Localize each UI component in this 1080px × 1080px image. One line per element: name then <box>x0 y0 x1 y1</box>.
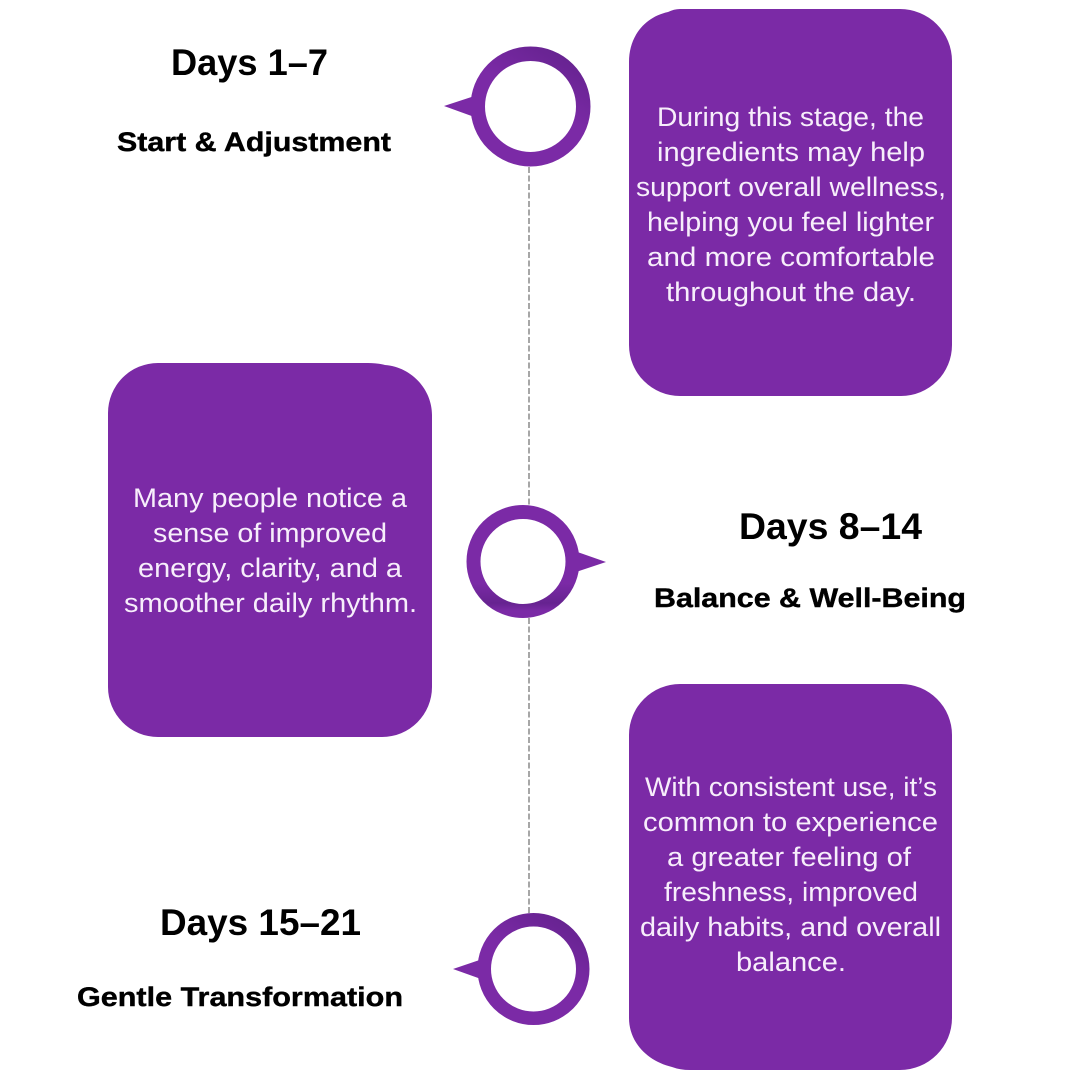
marker: days 1-7 ring <box>444 54 583 159</box>
panel: days 1-7 description: and more comfortable <box>647 242 935 272</box>
panel: days 8-14 description: energy, clarity, and a <box>138 553 402 583</box>
timeline connector <box>528 167 530 913</box>
marker: days 15-21 ring <box>453 920 583 1018</box>
panel: days 15-21 description <box>629 684 952 1070</box>
panel: days 15-21 description: a greater feeling of <box>667 842 912 872</box>
panel: days 8-14 description: Many people notice a <box>133 483 407 513</box>
panel: days 15-21 description: daily habits, and overall <box>640 912 941 942</box>
panel: days 1-7 description: ingredients may help <box>657 137 925 167</box>
marker: days 8-14 ring <box>474 512 606 611</box>
heading: days 8-14: Days 8–14 <box>739 506 922 547</box>
panel: days 15-21 description: freshness, improved <box>664 877 918 907</box>
subheading: gentle transformation: Gentle Transformation <box>77 982 403 1012</box>
panel: days 15-21 description: With consistent use, it’s <box>645 772 937 802</box>
subheading: balance and well-being: Balance & Well-Being <box>654 583 966 613</box>
panel: days 1-7 description <box>629 9 952 396</box>
panel: days 1-7 description: support overall wellness, <box>636 172 946 202</box>
panel: days 8-14 description: sense of improved <box>153 518 387 548</box>
panel: days 15-21 description: balance. <box>736 947 846 977</box>
subheading: start and adjustment: Start & Adjustment <box>117 127 391 157</box>
panel: days 1-7 description: During this stage, the <box>657 102 924 132</box>
heading: days 15-21: Days 15–21 <box>160 902 361 943</box>
panel: days 8-14 description <box>108 363 432 737</box>
panel: days 15-21 description: common to experience <box>643 807 938 837</box>
panel: days 1-7 description: throughout the day. <box>666 277 916 307</box>
panel: days 8-14 description: smoother daily rhythm. <box>124 588 417 618</box>
heading: days 1-7: Days 1–7 <box>171 42 328 83</box>
panel: days 1-7 description: helping you feel lighter <box>647 207 934 237</box>
